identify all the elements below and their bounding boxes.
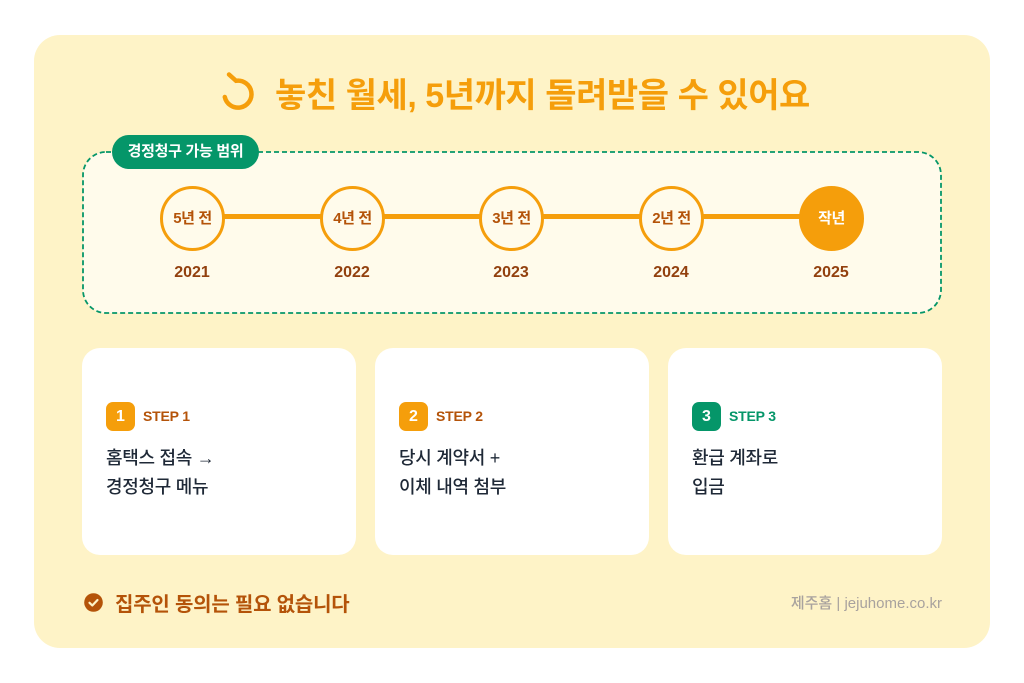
step 3 text: 환급 계좌로 [692,448,778,468]
timeline node: last year [799,186,864,251]
source credit: 제주홈 | jejuhome.co.kr [791,595,942,612]
title: 놓친 월세, 5년까지 돌려받을 수 있어요 [275,77,810,115]
step 3 number badge [692,402,721,431]
timeline connector [192,214,832,219]
year: 2022: 2022 [334,264,370,281]
step 2 text: 이체 내역 첨부 [399,477,506,497]
step 1 label: STEP 1 [143,408,190,424]
step 1 number badge: 1 [116,408,125,425]
step 2 text [399,448,506,497]
step 2 number badge [399,402,428,431]
panel: refund claim range [82,151,942,314]
timeline node: last year: 작년 [818,210,845,227]
badge: range label [112,135,259,169]
timeline node: 2 years ago: 2년 전 [652,210,691,227]
step 3 text: 입금 [692,477,725,497]
step 1 text [106,448,214,497]
step 2 label: STEP 2 [436,408,483,424]
year: 2024: 2024 [653,264,689,281]
step 3 text [692,448,778,497]
step 1 text: 경정청구 메뉴 [106,477,208,497]
timeline node: 5 years ago [160,186,225,251]
badge: range label: 경정청구 가능 범위 [128,143,243,160]
year: 2023: 2023 [493,264,529,281]
icon: refresh arrow [222,72,254,110]
timeline node: 2 years ago [639,186,704,251]
panel: step 3 [668,348,942,555]
panel: step 1 [82,348,356,555]
timeline node: 3 years ago [479,186,544,251]
icon: check circle [84,593,103,612]
step 3 label: STEP 3 [729,408,776,424]
timeline node: 3 years ago: 3년 전 [492,210,531,227]
year: 2021: 2021 [174,264,210,281]
step 3 number badge: 3 [702,408,711,425]
timeline node: 5 years ago: 5년 전 [173,210,212,227]
panel: step 2 [375,348,649,555]
step 1 number badge [106,402,135,431]
year: 2025: 2025 [813,264,849,281]
step 2 number badge: 2 [409,408,418,425]
note: tenant consent: 집주인 동의는 필요 없습니다 [115,594,349,616]
step 2 text: 당시 계약서 + [399,448,500,468]
timeline node: 4 years ago [320,186,385,251]
step 1 text: 홈택스 접속 → [106,448,214,468]
timeline node: 4 years ago: 4년 전 [333,210,372,227]
